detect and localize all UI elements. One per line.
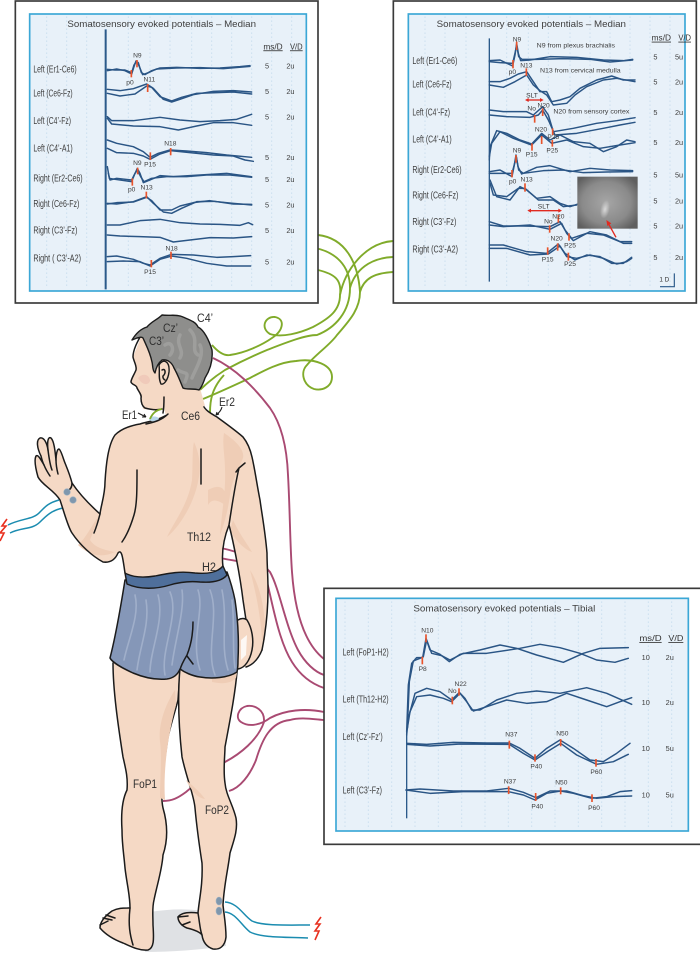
- peak labels: P25: [547, 134, 560, 141]
- blue stimulation wires: [8, 500, 310, 938]
- scale column: 10: [642, 698, 650, 707]
- panel: median nerve abnormal (top right): [393, 1, 696, 303]
- electrode labels: H2: [202, 562, 216, 574]
- peak labels: P15: [144, 162, 156, 169]
- channel labels: Right (Ce6-Fz): [33, 199, 79, 210]
- scale column: 5: [653, 108, 657, 117]
- traces: [489, 43, 635, 264]
- panel: tibial nerve: [324, 588, 700, 844]
- scale column: [639, 633, 683, 799]
- channel labels: Left (FoP1-H2): [343, 647, 389, 658]
- scale column: 5u: [666, 744, 674, 753]
- electrode labels: FoP2: [205, 805, 229, 817]
- peak labels: N37: [504, 778, 516, 785]
- left foot toes: [100, 908, 133, 945]
- scale column: 2u: [675, 196, 683, 205]
- peak labels: P60: [588, 805, 600, 812]
- scale column: 5: [653, 253, 657, 262]
- axis: [103, 29, 109, 289]
- electrode labels: Er2: [219, 397, 235, 409]
- head and neck: [131, 332, 205, 416]
- electrode labels: Ce6: [181, 411, 200, 423]
- scale column: 10: [642, 653, 650, 662]
- peak labels: N18: [164, 141, 177, 148]
- peak labels: N13: [141, 185, 153, 192]
- peak labels: P40: [530, 763, 543, 770]
- peak labels: N9: [133, 160, 142, 167]
- channel labels: Right (Er2-Ce6): [412, 165, 462, 176]
- peak labels: p0: [128, 186, 136, 193]
- peak labels: [509, 36, 576, 268]
- peak labels: P8: [419, 666, 427, 673]
- scale column: 2u: [286, 175, 294, 184]
- channel labels: Right (C3’-Fz): [412, 217, 456, 228]
- SLT arrows: [525, 93, 562, 213]
- peak labels: P25: [546, 148, 559, 155]
- scale column: 5: [653, 171, 657, 180]
- peak labels: N50: [555, 780, 568, 787]
- peak labels: N20: [552, 213, 565, 220]
- scale column: 2u: [675, 253, 683, 262]
- icon: stimulus zigzag ankle: [315, 917, 321, 940]
- scale column: 2u: [675, 138, 683, 147]
- peak labels: N9: [513, 148, 522, 155]
- channel labels: Left (Cz’-Fz’): [343, 732, 383, 743]
- axis: [487, 38, 491, 282]
- scale column: 10: [642, 744, 650, 753]
- channel labels: Left (Er1-Ce6): [33, 65, 77, 76]
- scale column: 2u: [286, 87, 294, 96]
- scale column: V/D: [290, 41, 303, 51]
- shorts seam: [180, 622, 193, 670]
- peak labels: No: [527, 106, 536, 113]
- peak labels: No: [448, 688, 457, 695]
- torso outline: [35, 414, 168, 573]
- electrode labels: FoP1: [133, 779, 157, 791]
- scale bar: [659, 273, 674, 287]
- channel labels: [343, 647, 389, 796]
- green recording wires: [200, 235, 393, 413]
- Er1 wire: [150, 409, 162, 419]
- peak labels: p0: [509, 179, 517, 186]
- electrode labels: C3’: [149, 336, 164, 348]
- panel title: Somatosensory evoked potentials – Median: [67, 19, 256, 29]
- scale column: 5: [653, 222, 657, 231]
- peak labels: N22: [455, 681, 467, 688]
- scale column: 2u: [675, 108, 683, 117]
- shorts: [110, 572, 238, 679]
- scale column: 5: [265, 175, 269, 184]
- scale column: 5: [653, 52, 657, 61]
- scale column: 5u: [675, 52, 683, 61]
- arrows to Er1 and Er2: [138, 407, 222, 417]
- peak labels: N11: [143, 77, 155, 84]
- scale column: 2u: [286, 61, 294, 70]
- scale column: 5: [265, 87, 269, 96]
- panel title: Somatosensory evoked potentials – Median: [437, 19, 626, 29]
- right leg: [178, 668, 237, 949]
- peak labels: N20: [551, 236, 563, 243]
- electrode labels: C4’: [197, 313, 213, 325]
- electrode labels: Th12: [187, 532, 211, 544]
- panel: median nerve normal (top left): [15, 1, 318, 303]
- channel labels: [412, 56, 462, 256]
- peak labels: P25: [564, 261, 576, 268]
- scale column: 10: [642, 790, 650, 799]
- channel labels: Right (Er2-Ce6): [33, 174, 83, 185]
- scale column: 2u: [666, 653, 674, 662]
- electrodes: [64, 416, 222, 915]
- scale column: 2u: [666, 698, 674, 707]
- scale column: 5: [265, 153, 269, 162]
- electrode labels: Cz’: [163, 323, 178, 335]
- scale column: 5: [265, 112, 269, 121]
- scale column: [652, 33, 691, 262]
- peak labels: N9: [133, 52, 142, 59]
- traces: [107, 61, 253, 266]
- scale column: 2u: [675, 222, 683, 231]
- scale column: ms/D: [639, 633, 662, 643]
- peak labels: N50: [556, 730, 569, 737]
- scale column: 2u: [286, 112, 294, 121]
- annotations: N20 from sensory cortex: [553, 109, 630, 116]
- scale column: 2u: [286, 153, 294, 162]
- channel labels: Left (Er1-Ce6): [412, 56, 457, 67]
- scale column: 5u: [675, 171, 683, 180]
- scale column: ms/D: [263, 41, 283, 51]
- peak markers: [512, 42, 569, 261]
- scale column: V/D: [668, 633, 683, 643]
- SLT arrows: SLT: [526, 93, 538, 100]
- SLT arrows: SLT: [538, 203, 550, 210]
- hair texture: [165, 330, 201, 382]
- right foot toes: [178, 913, 202, 935]
- annotations: N13 from cervical medulla: [540, 68, 621, 75]
- hair: [132, 315, 212, 390]
- electrode labels: [122, 313, 235, 817]
- scale column: 5: [653, 138, 657, 147]
- peak labels: No: [544, 218, 553, 225]
- peak labels: N18: [166, 246, 178, 253]
- neck shoulder stroke: [146, 414, 168, 424]
- peak labels: N37: [505, 732, 518, 739]
- peak labels: [419, 627, 603, 812]
- annotations: [537, 43, 630, 116]
- scale column: 2u: [286, 226, 294, 235]
- scale column: 2u: [286, 200, 294, 209]
- peak labels: P15: [526, 151, 538, 158]
- left leg: [100, 663, 181, 950]
- peak labels: [126, 52, 178, 276]
- magenta recording wires: [163, 358, 324, 801]
- scale column: 2u: [675, 77, 683, 86]
- scale column: 5: [265, 61, 269, 70]
- peak labels: P60: [590, 769, 603, 776]
- scale bar: 1 D: [659, 276, 670, 283]
- ground shadow: [145, 909, 226, 952]
- right hand: [238, 619, 253, 669]
- traces: [406, 638, 632, 800]
- scale column: ms/D: [652, 33, 671, 43]
- ear: [159, 361, 169, 384]
- peak labels: P15: [542, 256, 554, 263]
- channel labels: Left (Ce6-Fz): [33, 88, 73, 99]
- back shading: [220, 433, 243, 535]
- channel labels: Left (C4’-Fz): [33, 116, 71, 127]
- peak labels: P15: [144, 269, 156, 276]
- shorts pattern: [124, 590, 235, 675]
- channel labels: Left (Th12-H2): [343, 694, 389, 705]
- axis: [405, 732, 409, 818]
- annotations: N9 from plexus brachialis: [537, 43, 616, 50]
- torso and arms: [35, 405, 268, 668]
- scale column: 5: [653, 196, 657, 205]
- scale column: 5: [653, 77, 657, 86]
- channel labels: Right (Ce6-Fz): [412, 190, 458, 201]
- channel labels: Right (C3’-Fz): [33, 226, 77, 237]
- channel labels: Left (C4’-Fz): [412, 107, 450, 118]
- peak labels: N20: [538, 102, 550, 109]
- peak labels: P40: [531, 803, 544, 810]
- scale column: 5: [265, 257, 269, 266]
- channel labels: Left (C4’-A1): [33, 143, 73, 154]
- peak labels: N13: [520, 62, 533, 69]
- peak markers: [131, 60, 171, 267]
- peak labels: N13: [521, 177, 533, 184]
- scale column: 2u: [286, 257, 294, 266]
- leg shading: [160, 690, 176, 800]
- peak labels: p0: [126, 79, 134, 86]
- channel labels: Right ( C3’-A2): [33, 253, 81, 264]
- peak labels: P25: [564, 243, 576, 250]
- waistband: [125, 566, 227, 588]
- panel title: Somatosensory evoked potentials – Tibial: [413, 604, 595, 614]
- channel labels: Right (C3’-A2): [412, 245, 458, 256]
- peak labels: N9: [513, 36, 522, 43]
- scale column: 5: [265, 200, 269, 209]
- peak labels: p0: [509, 69, 516, 76]
- scale column: 5u: [666, 790, 674, 799]
- channel labels: Left (Ce6-Fz): [412, 80, 452, 91]
- figure: man seen from behind: [35, 315, 268, 950]
- peak labels: N20: [535, 127, 547, 134]
- scale column: 5: [265, 226, 269, 235]
- channel labels: [33, 65, 83, 264]
- scale column: [263, 41, 303, 266]
- channel labels: Left (C4’-A1): [412, 135, 452, 146]
- MRI inset image: [577, 177, 638, 237]
- channel labels: Left (C3’-Fz): [343, 785, 382, 796]
- forearm and finger lines: [44, 450, 72, 491]
- electrode labels: Er1: [122, 410, 137, 422]
- peak labels: N10: [421, 627, 434, 634]
- scale column: V/D: [678, 33, 691, 43]
- peak markers: [422, 634, 596, 802]
- icon: stimulus zigzag wrist: [0, 519, 7, 541]
